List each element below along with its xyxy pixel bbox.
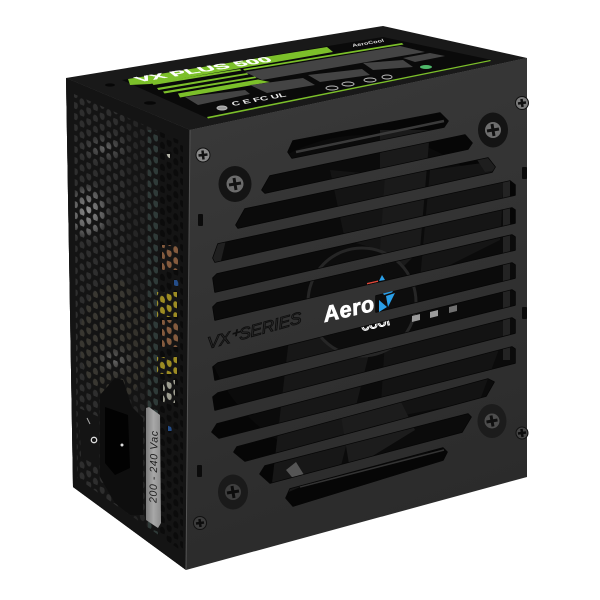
- power socket assembly: [79, 378, 161, 528]
- cooling fan behind slots: [213, 120, 510, 492]
- green stripes: [152, 43, 491, 118]
- small corner screws: [194, 96, 528, 530]
- ventilation slots: [212, 113, 515, 506]
- fan hub blue mark: [379, 275, 385, 281]
- model name: VX PLUS 500: [131, 55, 275, 84]
- voltage sticker: 200 - 240 Vac: [147, 430, 161, 504]
- green title band: [128, 47, 333, 85]
- front panel: [186, 58, 530, 570]
- specification label: [122, 37, 492, 118]
- fan hub wordmark: cool: [359, 312, 391, 335]
- certification marks: [217, 75, 392, 110]
- series mark: VX⁺SERIES: [206, 308, 303, 353]
- fan hub red mark: [367, 280, 378, 284]
- panel edge notches: [197, 167, 527, 477]
- green badge: [420, 65, 432, 69]
- small print blocks: [185, 46, 445, 105]
- blue logo mark: [379, 291, 395, 312]
- mounting slots on top panel: [105, 83, 156, 105]
- socket mounting frame: [100, 378, 143, 515]
- Aero logo: Aero: [320, 291, 377, 327]
- socket pin: [120, 444, 124, 446]
- top panel: [66, 26, 527, 134]
- electronic components: [157, 154, 179, 431]
- large recessed screws: [218, 112, 508, 510]
- product illustration: power supply unit: [66, 26, 529, 570]
- interior seen through mesh: [66, 86, 186, 570]
- mesh sheet: [66, 78, 190, 570]
- side panel: perforated mesh: [60, 70, 190, 570]
- socket inlet: [105, 407, 130, 475]
- rocker switch: [79, 408, 99, 467]
- voltage sticker: [146, 407, 161, 528]
- indicator lights: [412, 305, 457, 322]
- slot lip highlight: [296, 121, 444, 152]
- certification text: C E FC UL: [230, 91, 288, 107]
- brand mark on label: AeroCool: [352, 39, 385, 48]
